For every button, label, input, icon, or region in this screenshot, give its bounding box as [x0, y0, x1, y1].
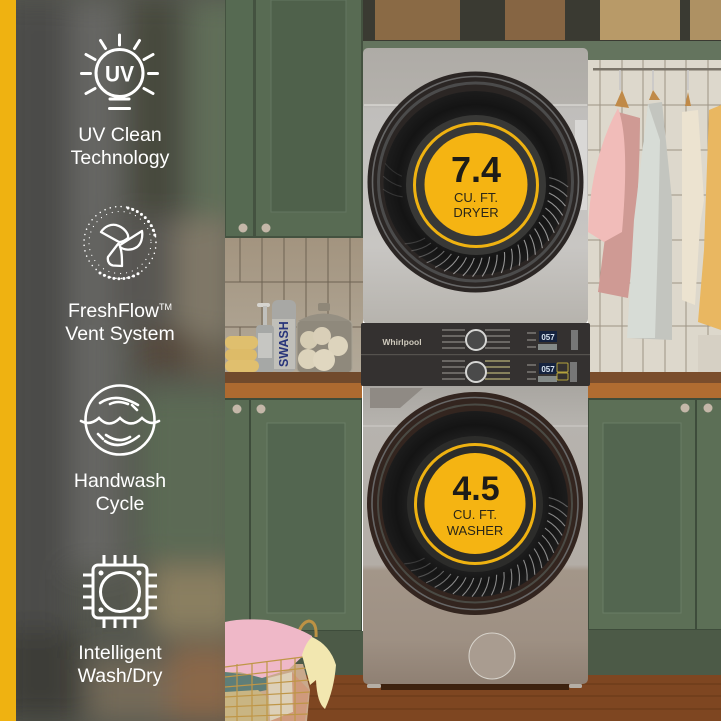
- icon: water waves in circle: [81, 386, 159, 454]
- label: FreshFlow: [68, 300, 172, 322]
- display: washer: 057: [541, 365, 555, 374]
- washer capacity badge: 4.5: [452, 470, 500, 508]
- washer door: [367, 392, 583, 615]
- laundry basket: [225, 619, 336, 721]
- background: counter right: [588, 372, 721, 398]
- dryer cabinet: [363, 48, 588, 324]
- dial: dryer: [466, 330, 486, 350]
- washer capacity badge: [407, 436, 543, 572]
- icon: chip with drum: [83, 555, 157, 628]
- background: counter left: [225, 372, 362, 398]
- dryer capacity badge: CU. FT.: [454, 190, 498, 205]
- dryer capacity badge: [406, 115, 546, 255]
- feature: Handwash Cycle: [74, 386, 166, 515]
- label: Intelligent: [78, 642, 162, 664]
- background: upper left cabinet: [225, 0, 363, 238]
- label: Cycle: [96, 493, 144, 515]
- display: dryer: 057: [541, 333, 555, 342]
- icon: UV bulb: UV: [105, 62, 134, 86]
- icon: fan with dotted ring: [84, 206, 156, 279]
- label: UV Clean: [78, 124, 162, 146]
- label: Technology: [71, 147, 170, 169]
- left blurred panel background: [16, 0, 225, 721]
- background: left backsplash tiles: [225, 238, 363, 373]
- dryer capacity badge: DRYER: [453, 205, 499, 220]
- feature: UV Clean Technology: [71, 35, 170, 169]
- display: dryer: [539, 331, 557, 342]
- upper right: wall, shelf and baskets: [363, 0, 721, 372]
- display: washer: [539, 363, 557, 374]
- washer capacity badge: CU. FT.: [453, 507, 497, 522]
- label: Vent System: [65, 323, 175, 345]
- yellow edge bar: [0, 0, 16, 721]
- background: lower left cabinet: [225, 398, 365, 677]
- label: TM: [159, 302, 172, 312]
- label: Wash/Dry: [78, 665, 163, 687]
- control panel: [361, 323, 590, 386]
- dial: washer: [466, 362, 486, 382]
- feature: Intelligent Wash/Dry: [78, 555, 163, 687]
- shadow beneath washer: [381, 684, 569, 690]
- label: Handwash: [74, 470, 166, 492]
- filter cap: [469, 633, 515, 679]
- washer cabinet: [363, 386, 588, 688]
- feature: FreshFlow Vent System: [65, 206, 175, 345]
- background: wooden floor: [225, 675, 721, 721]
- background: lower right cabinet: [588, 398, 721, 675]
- brand logo: Whirlpool: [382, 337, 422, 347]
- counter items: towels, bottles, jar: [225, 300, 352, 373]
- washer capacity badge: WASHER: [447, 523, 503, 538]
- dryer door: [368, 72, 584, 292]
- dryer capacity badge: 7.4: [451, 149, 501, 190]
- clothes on a rail: [588, 68, 721, 372]
- counter items: towels, bottles, jar: SWASH: [277, 321, 291, 367]
